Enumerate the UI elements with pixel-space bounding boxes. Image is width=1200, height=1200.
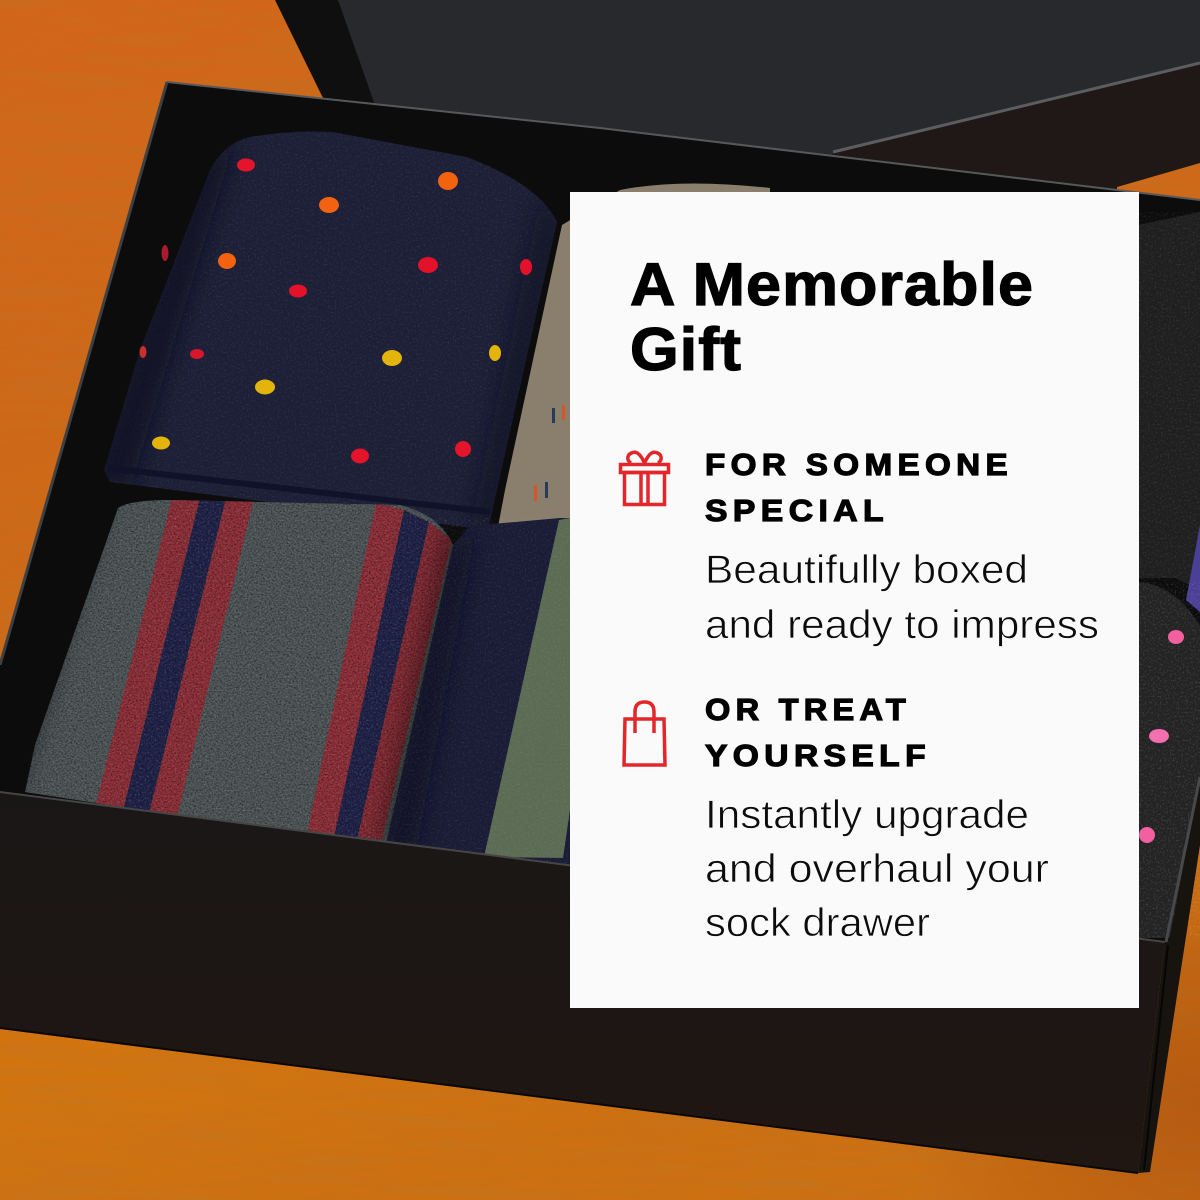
title: Gift bbox=[630, 316, 742, 383]
sock: purple sliver bbox=[1186, 525, 1200, 612]
heading: or treat yourself bbox=[705, 692, 931, 773]
sock: taupe patterned bbox=[497, 183, 770, 532]
text: beautifully boxed bbox=[705, 548, 1099, 647]
heading: for someone special: SPECIAL bbox=[705, 493, 889, 528]
title: A Memorable bbox=[630, 251, 1034, 318]
sock: grey with red and navy stripes bbox=[25, 500, 453, 841]
polka dots bbox=[140, 158, 532, 464]
title bbox=[630, 251, 1034, 383]
text: instantly upgrade: Instantly upgrade bbox=[705, 793, 1029, 837]
sock: charcoal with pink dots bbox=[1138, 582, 1200, 938]
text: instantly upgrade: and overhaul your bbox=[705, 847, 1049, 891]
heading: or treat yourself: OR TREAT bbox=[705, 692, 911, 727]
sock: charcoal, right side bbox=[1138, 212, 1200, 590]
text: beautifully boxed: Beautifully boxed bbox=[705, 548, 1028, 592]
heading: for someone special: FOR SOMEONE bbox=[705, 447, 1013, 482]
box lid bbox=[275, 0, 1200, 200]
sock: navy and green stripe bbox=[380, 518, 570, 868]
icon: shopping bag bbox=[624, 702, 665, 765]
box front wall bbox=[0, 777, 1200, 1173]
open gift box bbox=[0, 82, 1200, 945]
panel: memorable gift copy bbox=[570, 192, 1139, 1008]
sock: navy with coloured dots bbox=[90, 130, 570, 540]
text: beautifully boxed: and ready to impress bbox=[705, 603, 1099, 647]
heading: or treat yourself: YOURSELF bbox=[705, 738, 931, 773]
panel background bbox=[570, 192, 1139, 1008]
text: instantly upgrade: sock drawer bbox=[705, 901, 930, 945]
text: instantly upgrade bbox=[705, 793, 1049, 945]
heading: for someone special bbox=[705, 447, 1013, 528]
icon: gift box bbox=[620, 452, 668, 505]
